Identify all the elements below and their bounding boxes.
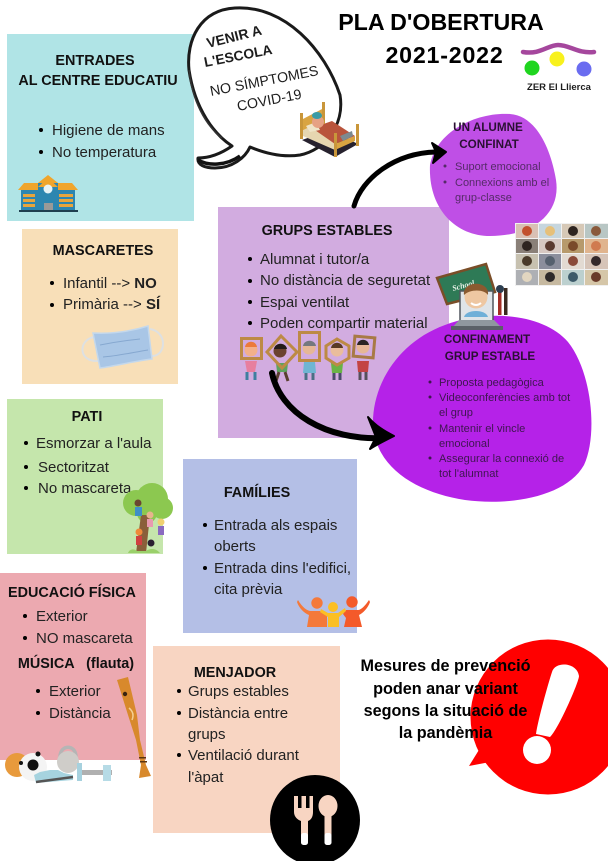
list: música — [36, 683, 111, 722]
icon: recorder flute — [117, 677, 151, 778]
list: grups estables: Alumnat i tutor/a — [260, 251, 370, 268]
bubble text: L'ESCOLA — [203, 42, 274, 70]
heading: un alumne confinat: CONFINAT — [459, 138, 520, 151]
list: grups estables: Espai ventilat — [260, 294, 350, 311]
heading: entrades — [18, 53, 178, 89]
list: famílies: cita prèvia — [214, 581, 283, 598]
icon: face mask — [82, 326, 163, 368]
callout: mesures de prevenció: Mesures de prevenció — [360, 657, 531, 675]
list: confinament grup estable: Assegurar la connexió de — [439, 453, 564, 465]
title: 2021-2022 — [385, 42, 504, 68]
heading: menjador: MENJADOR — [194, 665, 277, 681]
list: confinament grup estable: emocional — [439, 438, 490, 450]
heading: un alumne confinat — [453, 121, 523, 151]
icon: teacher on laptop with blackboard: School — [451, 278, 476, 293]
heading: educació física: EDUCACIÓ FÍSICA — [8, 583, 137, 601]
panel: educació física i música — [0, 573, 151, 783]
list: grups estables: No distància de seguretat — [260, 272, 431, 289]
list: grups estables: Poden compartir material — [260, 315, 428, 332]
icon: children in tree — [123, 483, 173, 553]
list: música: Exterior — [49, 683, 101, 700]
panel: entrades al centre educatiu — [7, 34, 194, 221]
list: confinament grup estable: Proposta pedagògica — [439, 377, 545, 389]
list: un alumne confinat: Suport emocional — [455, 161, 541, 173]
list: menjador: grups — [188, 726, 226, 743]
panel: pati — [7, 399, 173, 554]
title: PLA D'OBERTURA — [338, 9, 544, 35]
list: famílies: Entrada dins l'edifici, — [214, 560, 351, 577]
list: música: Distància — [49, 705, 111, 722]
list: entrades: Higiene de mans — [52, 122, 165, 139]
heading: grups estables: GRUPS ESTABLES — [262, 223, 393, 239]
bubble text: VENIR A — [205, 22, 263, 51]
heading: entrades: ENTRADES — [55, 53, 135, 69]
list: un alumne confinat — [444, 161, 549, 204]
callout: mesures de prevenció: la pandèmia — [399, 724, 493, 742]
list: menjador: Ventilació durant — [188, 747, 300, 764]
list: mascaretes — [50, 275, 161, 313]
panel: menjador — [153, 646, 360, 861]
icon: fork and spoon — [270, 775, 360, 861]
heading: música: MÚSICA (flauta) — [18, 654, 134, 672]
list: un alumne confinat: grup-classe — [455, 192, 512, 204]
list: menjador: Grups estables — [188, 683, 289, 700]
list: famílies: Entrada als espais — [214, 517, 337, 534]
list: un alumne confinat: Connexions amb el — [455, 177, 549, 189]
list: entrades — [39, 122, 165, 161]
list: menjador: Distància entre — [188, 705, 288, 722]
list: famílies: oberts — [214, 538, 256, 555]
arrow: grups estables to confinament — [272, 373, 394, 449]
callout: mesures de prevenció: segons la situació de — [364, 702, 527, 720]
icon: teacher on laptop with blackboard — [437, 264, 508, 330]
list: mascaretes: Primària --> SÍ — [63, 296, 161, 313]
list: famílies — [203, 517, 351, 598]
list: educació física — [23, 608, 133, 647]
list: grups estables — [248, 251, 431, 332]
arrow: grups estables to alumne confinat — [354, 143, 446, 206]
icon: videoconference grid — [515, 223, 608, 286]
list: mascaretes: Infantil --> NO — [63, 275, 157, 292]
title — [338, 9, 544, 68]
list: pati: Sectoritzat — [38, 459, 110, 476]
heading: famílies: FAMÍLIES — [224, 484, 291, 501]
list: confinament grup estable: tot l'alumnat — [439, 468, 498, 480]
heading: un alumne confinat: UN ALUMNE — [453, 121, 523, 134]
list: pati: No mascareta — [38, 480, 132, 497]
blob: un alumne confinat — [430, 114, 557, 236]
heading: entrades: AL CENTRE EDUCATIU — [18, 73, 178, 89]
list: educació física: NO mascareta — [36, 630, 133, 647]
icon: family — [297, 596, 370, 627]
callout: mesures de prevenció — [360, 657, 531, 742]
icon: school building — [18, 175, 78, 212]
icon: sports equipment — [5, 747, 112, 783]
heading: confinament grup estable: CONFINAMENT — [444, 333, 531, 346]
bubble text: NO SÍMPTOMES — [209, 62, 320, 100]
callout: mesures de prevenció: poden anar variant — [373, 680, 519, 698]
bubble text: COVID-19 — [236, 87, 303, 115]
panel: grups estables — [218, 207, 449, 438]
icon: child in bed — [300, 102, 359, 157]
heading: pati: PATI — [72, 409, 102, 425]
logo: ZER El Llierca — [523, 45, 594, 93]
list: confinament grup estable: Mantenir el vincle — [439, 423, 525, 435]
list: pati — [24, 435, 152, 497]
heading: confinament grup estable — [444, 333, 535, 363]
icon: red exclamation speech bubble — [469, 640, 608, 794]
list: menjador — [177, 683, 300, 786]
bubble text — [203, 22, 320, 115]
list: entrades: No temperatura — [52, 144, 157, 161]
list: pati: Esmorzar a l'aula — [36, 435, 152, 452]
list: educació física: Exterior — [36, 608, 88, 625]
panel: mascaretes — [22, 229, 178, 384]
heading: mascaretes: MASCARETES — [53, 243, 154, 259]
blob: confinament grup estable — [373, 316, 591, 502]
heading: confinament grup estable: GRUP ESTABLE — [445, 350, 535, 363]
panel: famílies — [183, 459, 370, 633]
list: confinament grup estable: el grup — [439, 407, 473, 419]
logo: ZER El Llierca: ZER El Llierca — [527, 82, 592, 93]
list: confinament grup estable — [428, 377, 570, 480]
list: confinament grup estable: Videoconferències amb tot — [439, 392, 570, 404]
list: menjador: l'àpat — [188, 769, 224, 786]
icon: children with frames — [242, 332, 375, 381]
speech bubble: venir a l'escola — [189, 8, 359, 168]
